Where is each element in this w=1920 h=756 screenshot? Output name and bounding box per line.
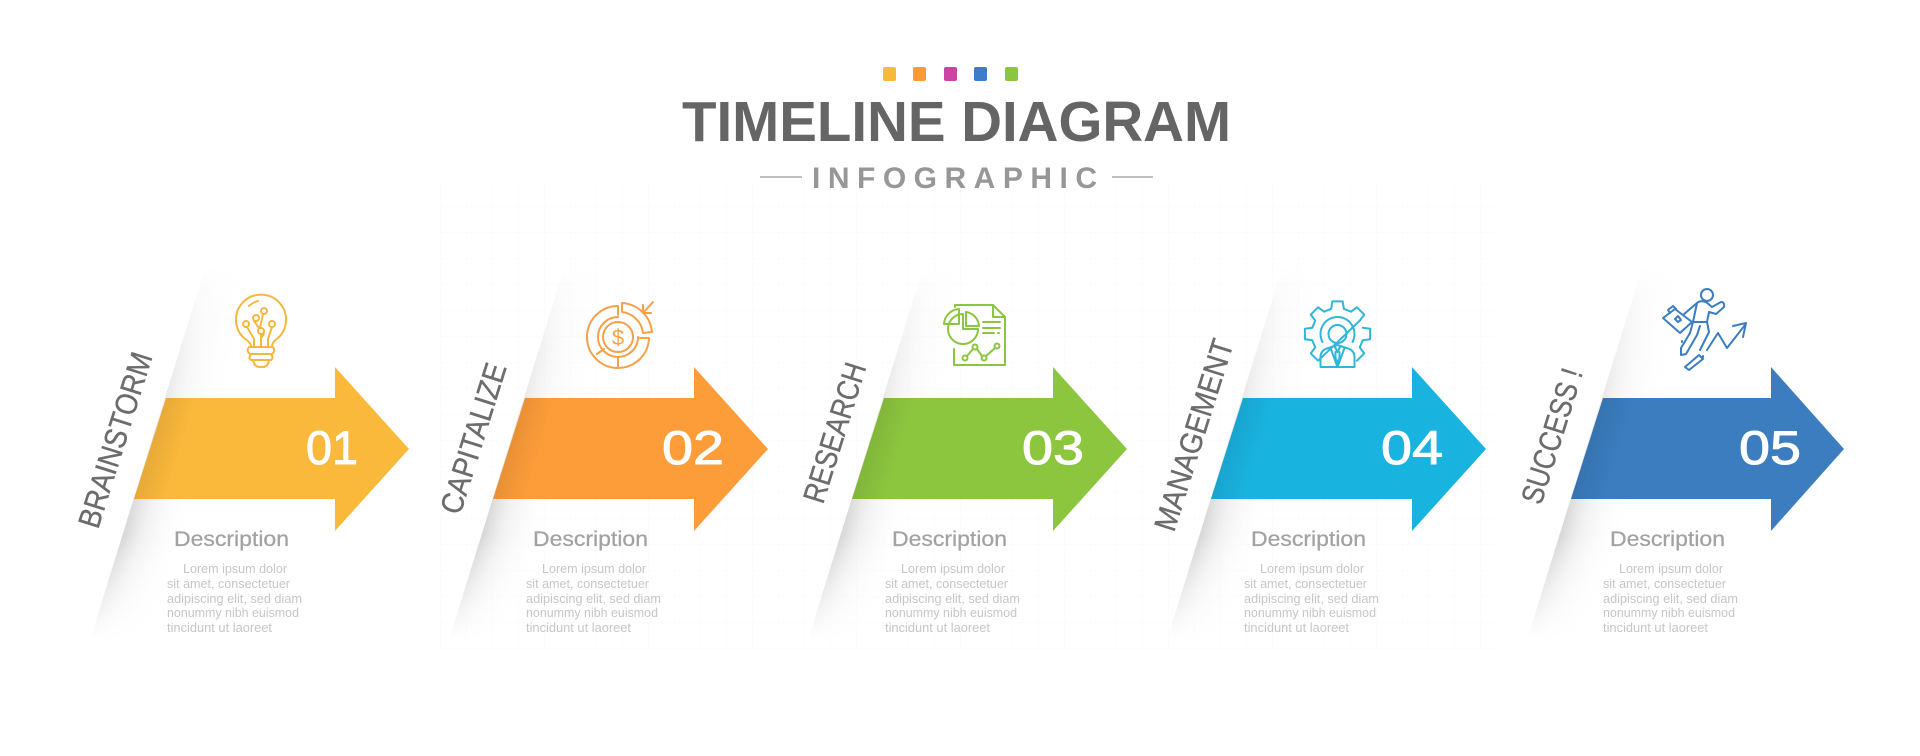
description text bbox=[1603, 561, 1738, 635]
step 3: research bbox=[803, 304, 1127, 632]
label: RESEARCH bbox=[796, 358, 873, 507]
step 2: capitalize bbox=[442, 301, 768, 632]
description text: nonummy nibh euismod bbox=[526, 605, 658, 620]
step 5: success bbox=[1522, 288, 1844, 632]
icon: businessman running up arrow bbox=[1663, 289, 1746, 370]
description text: sit amet, consectetuer bbox=[885, 576, 1009, 591]
label: BRAINSTORM bbox=[71, 348, 159, 532]
description text bbox=[885, 561, 1020, 635]
slanted shadow band bbox=[1174, 316, 1270, 618]
subtitle: INFOGRAPHIC bbox=[812, 162, 1097, 195]
description text: adipiscing elit, sed diam bbox=[167, 591, 302, 606]
description text: tincidunt ut laoreet bbox=[1244, 620, 1349, 635]
slanted shadow band bbox=[815, 316, 910, 618]
color squares bbox=[883, 67, 1018, 81]
icon: dollar target bbox=[587, 302, 653, 368]
description text: nonummy nibh euismod bbox=[1244, 605, 1376, 620]
description heading: Description bbox=[174, 528, 289, 551]
description heading: Description bbox=[1610, 528, 1725, 551]
number: 02 bbox=[662, 421, 724, 474]
icon: report document bbox=[944, 305, 1005, 365]
label: CAPITALIZE bbox=[433, 359, 514, 518]
number: 01 bbox=[306, 421, 358, 474]
number: 04 bbox=[1381, 421, 1443, 474]
description text: sit amet, consectetuer bbox=[526, 576, 650, 591]
description text: Lorem ipsum dolor bbox=[542, 561, 647, 576]
number: 03 bbox=[1022, 421, 1084, 474]
icon: dollar target: $ bbox=[612, 325, 624, 350]
description text: nonummy nibh euismod bbox=[167, 605, 299, 620]
arrow bbox=[852, 367, 1127, 531]
slanted shadow band bbox=[1534, 316, 1630, 618]
description text bbox=[1244, 561, 1379, 635]
description text bbox=[526, 561, 661, 635]
description text: Lorem ipsum dolor bbox=[183, 561, 288, 576]
description text: nonummy nibh euismod bbox=[1603, 605, 1735, 620]
arrow bbox=[493, 367, 768, 531]
description text: tincidunt ut laoreet bbox=[885, 620, 990, 635]
description heading: Description bbox=[1251, 528, 1366, 551]
arrow bbox=[134, 367, 409, 531]
description text bbox=[167, 561, 302, 635]
background grid bbox=[440, 180, 1500, 650]
description text: Lorem ipsum dolor bbox=[1619, 561, 1724, 576]
description text: adipiscing elit, sed diam bbox=[1244, 591, 1379, 606]
description text: adipiscing elit, sed diam bbox=[526, 591, 661, 606]
arrow bbox=[1571, 367, 1844, 531]
step 1: brainstorm bbox=[78, 294, 409, 632]
description text: adipiscing elit, sed diam bbox=[1603, 591, 1738, 606]
description heading: Description bbox=[892, 528, 1007, 551]
description text: tincidunt ut laoreet bbox=[167, 620, 272, 635]
label: MANAGEMENT bbox=[1147, 335, 1241, 535]
step 4: management bbox=[1154, 300, 1486, 632]
arrow bbox=[1211, 367, 1486, 531]
description text: Lorem ipsum dolor bbox=[1260, 561, 1365, 576]
description text: adipiscing elit, sed diam bbox=[885, 591, 1020, 606]
number: 05 bbox=[1739, 421, 1801, 474]
description text: sit amet, consectetuer bbox=[167, 576, 291, 591]
icon: gear with person bbox=[1305, 301, 1370, 367]
description text: nonummy nibh euismod bbox=[885, 605, 1017, 620]
title: TIMELINE DIAGRAM bbox=[682, 90, 1231, 154]
description text: Lorem ipsum dolor bbox=[901, 561, 1006, 576]
label: SUCCESS ! bbox=[1514, 364, 1590, 508]
description text: sit amet, consectetuer bbox=[1603, 576, 1727, 591]
slanted shadow band bbox=[456, 316, 552, 618]
description text: sit amet, consectetuer bbox=[1244, 576, 1368, 591]
icon: light bulb bbox=[236, 295, 286, 367]
description heading: Description bbox=[533, 528, 648, 551]
slanted shadow band bbox=[97, 316, 192, 618]
description text: tincidunt ut laoreet bbox=[526, 620, 631, 635]
description text: tincidunt ut laoreet bbox=[1603, 620, 1708, 635]
